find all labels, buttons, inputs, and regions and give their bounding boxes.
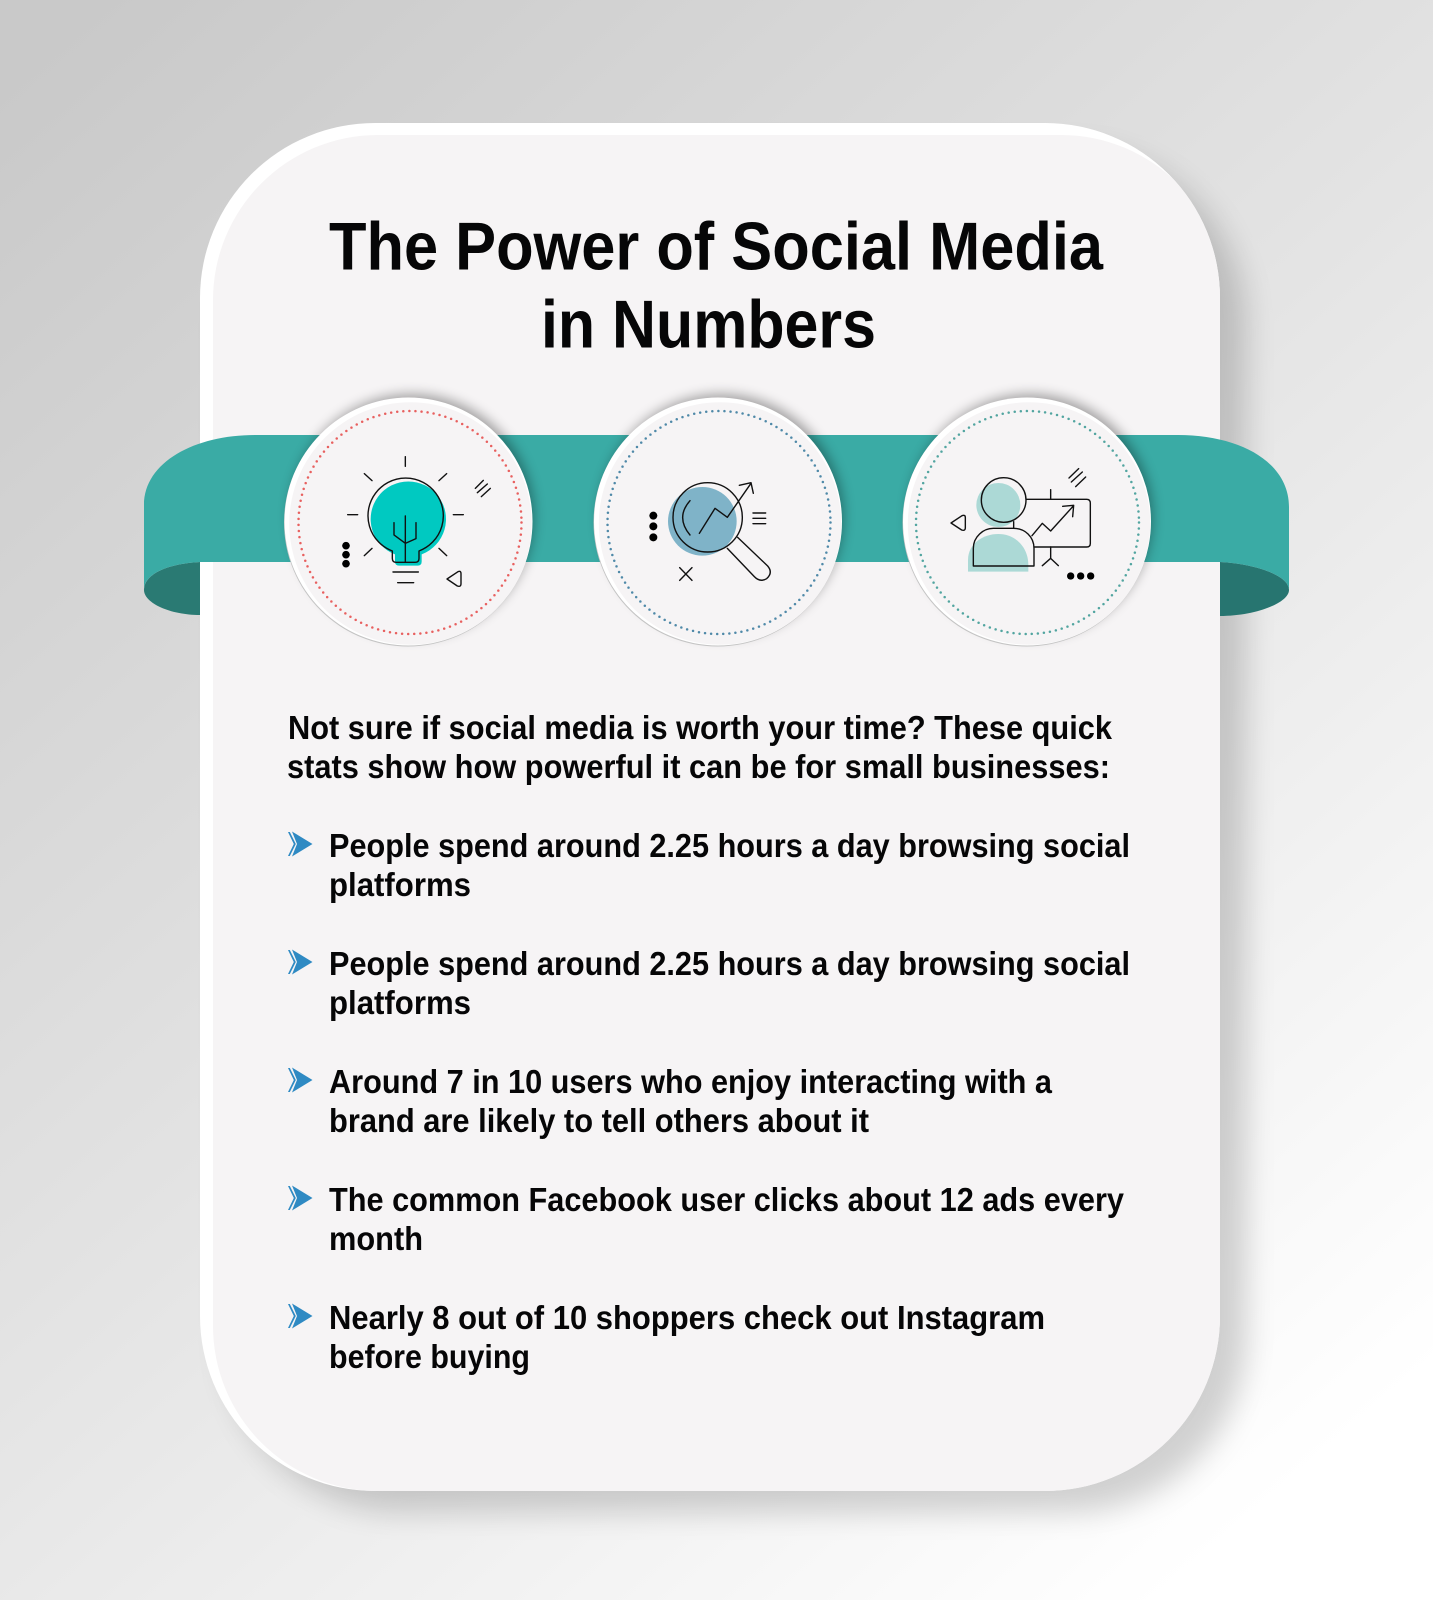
icon: light bulb (342, 457, 490, 586)
circle badge: presenter (902, 394, 1152, 646)
circle badge: light bulb (284, 394, 534, 646)
intro text: Not sure if social media is worth your time? These quick (288, 710, 1112, 747)
icon: chevron bullet (288, 1304, 312, 1328)
list item 4: The common Facebook user clicks about 12 ads every (329, 1182, 1124, 1219)
title: The Power of Social Media (329, 208, 1104, 284)
card shadow (226, 150, 1246, 1512)
icon: magnifying glass with growth arrow (649, 483, 770, 580)
icon: chevron bullet (288, 1068, 312, 1092)
panel: main card (200, 123, 1226, 1491)
title: in Numbers (541, 286, 876, 362)
list item 3 (288, 1064, 1052, 1140)
icon: chevron bullet (288, 950, 312, 974)
list item 5: before buying (329, 1339, 530, 1376)
icon: presenter with chart board (951, 469, 1094, 580)
list item 2 (288, 946, 1130, 1022)
list item 1 (288, 828, 1130, 904)
intro text (287, 710, 1112, 786)
list item 4: month (329, 1221, 423, 1258)
intro text: stats show how powerful it can be for small businesses: (287, 749, 1110, 786)
icon: chevron bullet (288, 832, 312, 856)
list item 3: brand are likely to tell others about it (329, 1103, 869, 1140)
ribbon banner (144, 435, 1289, 616)
list item 2: People spend around 2.25 hours a day browsing social (329, 946, 1130, 983)
list item 1: People spend around 2.25 hours a day browsing social (329, 828, 1130, 865)
list item 5: Nearly 8 out of 10 shoppers check out Instagram (329, 1300, 1045, 1337)
icon: chevron bullet (288, 1186, 312, 1210)
list item 1: platforms (329, 867, 471, 904)
list item 5 (288, 1300, 1045, 1376)
circle badge: magnifying glass (594, 394, 844, 646)
title (329, 208, 1104, 362)
list item 2: platforms (329, 985, 471, 1022)
list item 3: Around 7 in 10 users who enjoy interacting with a (329, 1064, 1052, 1101)
list item 4 (288, 1182, 1124, 1258)
